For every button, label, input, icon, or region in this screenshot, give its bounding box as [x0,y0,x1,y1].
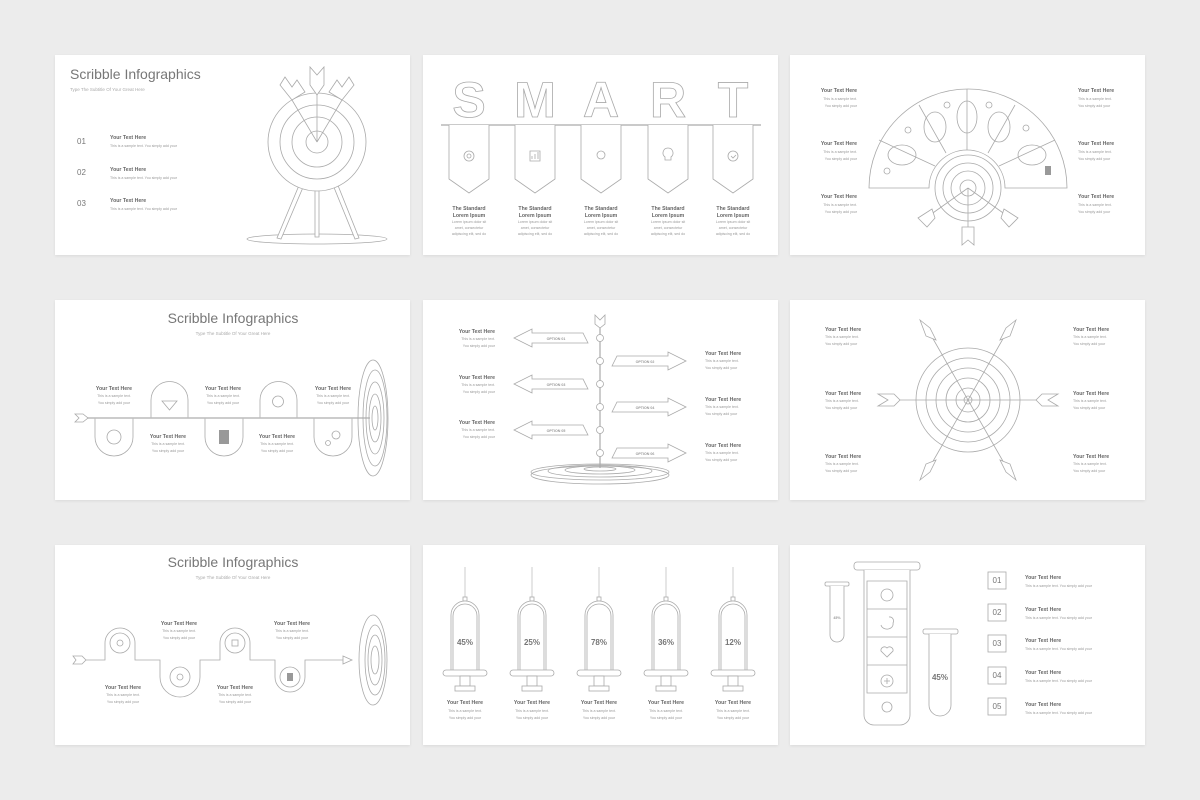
banner texts: Lorem Ipsum [519,213,552,219]
target with arrows [918,155,1018,245]
left texts: This is a sample text. [823,97,857,101]
banner texts: Lorem Ipsum [652,213,685,219]
numbered list: 02 [993,608,1002,617]
texts: Your Text Here [581,700,617,706]
list items: 02 [77,168,86,177]
banner texts: The Standard [651,206,685,212]
SMART letters: T [718,72,748,128]
target with arrows [878,320,1058,480]
texts: Your Text Here [315,386,351,392]
banner texts: Lorem Ipsum [585,213,618,219]
texts: You simply add your [705,366,738,370]
left texts: This is a sample text. [823,150,857,154]
texts: You simply add your [98,401,131,405]
texts: This is a sample text. [260,442,294,446]
fan chart [869,89,1067,188]
title [168,554,298,580]
texts: Your Text Here [96,386,132,392]
texts: This is a sample text. [448,709,482,713]
texts: You simply add your [152,449,185,453]
texts: Your Text Here [217,685,253,691]
right texts: This is a sample text. [1078,203,1112,207]
banner texts: The Standard [452,206,486,212]
banner texts: amet, consectetur [719,226,748,230]
texts: This is a sample text. [515,709,549,713]
texts: You simply add your [261,449,294,453]
SMART letters: A [583,72,619,128]
numbered list: Your Text Here [1025,575,1061,581]
texts [447,700,751,720]
syringe 1 [443,567,487,691]
small tube left: 45% [833,616,841,620]
texts: You simply add your [705,412,738,416]
title [168,310,298,336]
rod [441,124,761,126]
texts: You simply add your [1073,342,1106,346]
SMART letters: R [650,72,686,128]
banner texts: Lorem Ipsum [717,213,750,219]
banner texts: amet, consectetur [587,226,616,230]
texts: Your Text Here [459,329,495,335]
pole [595,315,605,468]
banner texts: adipiscing elit, sed do [716,232,750,236]
numbered list: 03 [993,639,1002,648]
texts: Your Text Here [705,397,741,403]
arrow line [75,414,370,422]
texts: Your Text Here [259,434,295,440]
option arrows: OPTION 02 [636,360,654,364]
left texts: You simply add your [825,157,858,161]
option arrows: OPTION 05 [547,429,565,433]
option arrows: OPTION 06 [636,452,654,456]
title: Type The Subtitle Of Your Great Here [196,331,271,336]
syringe 2: 25% [524,638,540,647]
right texts: Your Text Here [1078,141,1114,147]
texts: This is a sample text. [705,451,739,455]
numbered list: 01 [993,576,1002,585]
texts: Your Text Here [648,700,684,706]
title: Type The Subtitle Of Your Great Here [196,575,271,580]
small tube right [923,629,958,716]
texts: You simply add your [317,401,350,405]
texts: This is a sample text. [716,709,750,713]
big tube [854,562,920,725]
title: Scribble Infographics [168,310,298,326]
texts: You simply add your [825,469,858,473]
texts: This is a sample text. [206,394,240,398]
small tube left [825,582,849,642]
numbered list: This is a sample text. You simply add your [1025,647,1093,651]
banner texts: amet, consectetur [455,226,484,230]
right texts [1078,88,1114,214]
texts: This is a sample text. [106,693,140,697]
texts [459,329,741,462]
texts: Your Text Here [514,700,550,706]
texts: Your Text Here [825,454,861,460]
banner texts [452,206,750,236]
right texts: You simply add your [1078,104,1111,108]
texts: Your Text Here [1073,327,1109,333]
title [70,66,201,92]
texts: This is a sample text. [275,629,309,633]
texts: You simply add your [705,458,738,462]
option arrows: OPTION 04 [636,406,654,410]
texts: This is a sample text. [825,399,859,403]
right texts: Your Text Here [1078,194,1114,200]
syringe 5 [711,567,755,691]
banner texts: Lorem ipsum dolor sit [651,220,685,224]
texts: This is a sample text. [151,442,185,446]
texts: Your Text Here [205,386,241,392]
left texts: Your Text Here [821,88,857,94]
SMART letters: M [514,72,556,128]
small tube right: 45% [932,673,948,682]
texts: You simply add your [107,700,140,704]
texts: You simply add your [463,390,496,394]
left texts: Your Text Here [821,141,857,147]
syringe 4: 36% [658,638,674,647]
texts: This is a sample text. [218,693,252,697]
numbered list: This is a sample text. You simply add your [1025,711,1093,715]
syringe 5: 12% [725,638,741,647]
syringe 4 [644,567,688,691]
list items: This is a sample text. You simply add your [110,176,178,180]
texts: Your Text Here [705,443,741,449]
texts: You simply add your [1073,469,1106,473]
panel: slide 5 signpost options [423,300,778,500]
texts: This is a sample text. [649,709,683,713]
numbered list [988,572,1093,715]
texts [105,621,310,704]
texts: This is a sample text. [705,359,739,363]
banner texts: Lorem ipsum dolor sit [452,220,486,224]
banners [449,125,753,193]
texts: Your Text Here [705,351,741,357]
texts: You simply add your [516,716,549,720]
texts: Your Text Here [1073,454,1109,460]
title: Scribble Infographics [70,66,201,82]
texts: This is a sample text. [582,709,616,713]
texts: This is a sample text. [1073,335,1107,339]
texts: Your Text Here [161,621,197,627]
texts: This is a sample text. [705,405,739,409]
texts [825,327,1109,473]
numbered list: Your Text Here [1025,670,1061,676]
numbered list: 04 [993,671,1002,680]
texts: You simply add your [825,406,858,410]
numbered list: This is a sample text. You simply add your [1025,584,1093,588]
texts: This is a sample text. [97,394,131,398]
target base [531,464,669,484]
right texts: This is a sample text. [1078,97,1112,101]
icon: target on easel with arrows [247,67,387,244]
syringe 2 [510,567,554,691]
list items: Your Text Here [110,167,146,173]
texts: You simply add your [717,716,750,720]
texts: Your Text Here [447,700,483,706]
panel: slide 7 winding path [55,545,410,745]
banner texts: adipiscing elit, sed do [452,232,486,236]
banner texts: Lorem ipsum dolor sit [716,220,750,224]
option arrows: OPTION 01 [547,337,565,341]
right texts: This is a sample text. [1078,150,1112,154]
syringe 3: 78% [591,638,607,647]
title: Scribble Infographics [168,554,298,570]
target side view [358,360,388,476]
left texts: You simply add your [825,104,858,108]
banner texts: The Standard [716,206,750,212]
texts: You simply add your [825,342,858,346]
banner texts: The Standard [584,206,618,212]
syringe 1: 45% [457,638,473,647]
texts: You simply add your [650,716,683,720]
winding path [73,628,352,697]
right texts: Your Text Here [1078,88,1114,94]
numbered list: Your Text Here [1025,702,1061,708]
banner texts: Lorem ipsum dolor sit [518,220,552,224]
texts: You simply add your [583,716,616,720]
banner texts: Lorem Ipsum [453,213,486,219]
texts: Your Text Here [825,327,861,333]
texts: This is a sample text. [1073,462,1107,466]
texts: Your Text Here [105,685,141,691]
panel: slide 1 archery target list [55,55,410,255]
left texts: Your Text Here [821,194,857,200]
banner texts: adipiscing elit, sed do [584,232,618,236]
syringe 3 [577,567,621,691]
panel: slide 9 test tubes [790,545,1145,745]
texts: Your Text Here [459,420,495,426]
texts: This is a sample text. [825,335,859,339]
list items: This is a sample text. You simply add your [110,207,178,211]
right texts: You simply add your [1078,210,1111,214]
banner texts: Lorem ipsum dolor sit [584,220,618,224]
list items: Your Text Here [110,135,146,141]
option arrows [514,329,686,462]
panel: slide 8 syringes [423,545,778,745]
texts: You simply add your [207,401,240,405]
panel: slide 3 fan target [790,55,1145,255]
texts: Your Text Here [459,375,495,381]
banner texts: adipiscing elit, sed do [651,232,685,236]
list items [77,135,178,211]
SMART letters [452,72,748,128]
right texts: You simply add your [1078,157,1111,161]
texts: You simply add your [163,636,196,640]
list items: 03 [77,199,86,208]
banner texts: adipiscing elit, sed do [518,232,552,236]
option arrows: OPTION 03 [547,383,565,387]
texts: You simply add your [449,716,482,720]
texts: You simply add your [219,700,252,704]
list items: This is a sample text. You simply add your [110,144,178,148]
panel: slide 2 SMART banners [423,55,778,255]
list items: 01 [77,137,86,146]
panel: slide 6 crossed arrows target [790,300,1145,500]
texts: Your Text Here [274,621,310,627]
texts: You simply add your [1073,406,1106,410]
texts: Your Text Here [1073,391,1109,397]
left texts [821,88,858,214]
texts: This is a sample text. [461,337,495,341]
texts: This is a sample text. [1073,399,1107,403]
SMART letters: S [452,72,486,128]
numbered list: This is a sample text. You simply add your [1025,616,1093,620]
numbered list: Your Text Here [1025,607,1061,613]
texts: You simply add your [463,435,496,439]
left texts: This is a sample text. [823,203,857,207]
texts: You simply add your [463,344,496,348]
texts: This is a sample text. [162,629,196,633]
numbered list: This is a sample text. You simply add your [1025,679,1093,683]
texts: This is a sample text. [461,383,495,387]
texts: This is a sample text. [461,428,495,432]
texts: Your Text Here [150,434,186,440]
left texts: You simply add your [825,210,858,214]
target side view [359,615,387,705]
texts: This is a sample text. [316,394,350,398]
banner texts: The Standard [518,206,552,212]
pills [95,382,352,456]
texts: Your Text Here [715,700,751,706]
banner texts: amet, consectetur [654,226,683,230]
texts: You simply add your [276,636,309,640]
list items: Your Text Here [110,198,146,204]
title: Type The Subtitle Of Your Great Here [70,87,145,92]
numbered list: Your Text Here [1025,638,1061,644]
texts [96,386,351,453]
banner texts: amet, consectetur [521,226,550,230]
texts: Your Text Here [825,391,861,397]
texts: This is a sample text. [825,462,859,466]
numbered list: 05 [993,702,1002,711]
panel: slide 4 arrow timeline [55,300,410,500]
